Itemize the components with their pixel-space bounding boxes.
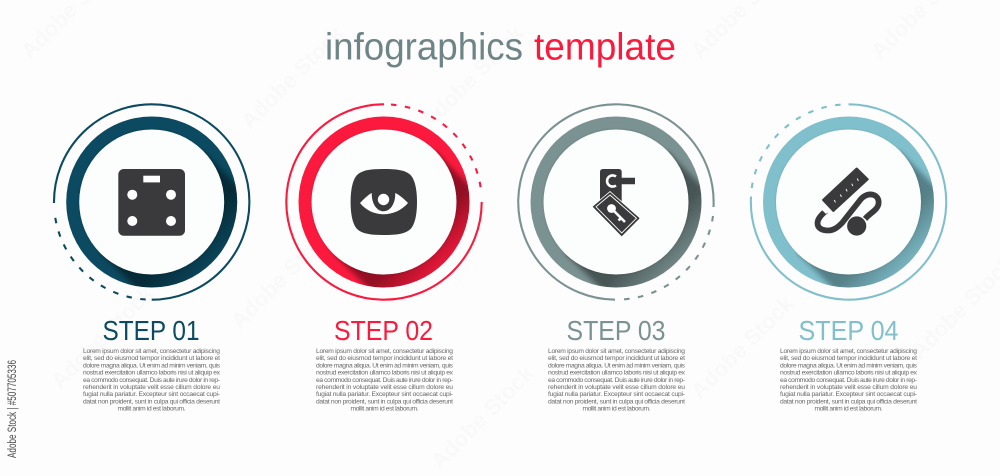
text block: step 03: ea commodo consequat. Duis aute irure dolor in rep-	[548, 377, 685, 384]
text block: step 02: nostrud exercitation ullamco laboris nisi ut aliquip ex	[316, 370, 454, 377]
text block: step 02: datat non proident, sunt in culpa qui officia deserunt	[316, 398, 453, 405]
text block: step 01: fugiat nulla pariatur. Excepteur sint occaecat cupi-	[83, 391, 220, 398]
text block: step 02: dolore magna aliqua. Ut enim ad minim veniam, quis	[316, 362, 454, 369]
watermark background: Adobe Stock	[46, 280, 159, 394]
text block: step 03: rehenderit in voluptate velit esse cillum dolore eu	[548, 384, 685, 391]
text block: step 02: rehenderit in voluptate velit esse cillum dolore eu	[316, 384, 453, 391]
text block: step 01: elit, sed do eiusmod tempor incididunt ut labore et	[83, 355, 220, 362]
text block: step 01: nostrud exercitation ullamco laboris nisi ut aliquip ex	[83, 370, 221, 377]
text block: step 02: ea commodo consequat. Duis aute irure dolor in rep-	[316, 377, 453, 384]
text block: step 03	[548, 348, 686, 413]
circle: step 01 rings	[52, 103, 250, 301]
text block: step 02	[316, 348, 454, 413]
text block: step 01: Lorem ipsum dolor sit amet, consectetur adipiscing	[83, 348, 220, 355]
text block: step 01	[83, 348, 221, 413]
text block: step 01: rehenderit in voluptate velit esse cillum dolore eu	[83, 384, 220, 391]
title	[325, 26, 676, 68]
text block: step 04: nostrud exercitation ullamco laboris nisi ut aliquip ex	[780, 370, 918, 377]
watermark background: Adobe Stock	[426, 360, 539, 474]
watermark background: Adobe Stock	[416, 20, 529, 134]
text block: step 04: fugiat nulla pariatur. Excepteur sint occaecat cupi-	[780, 391, 917, 398]
text block: step 04: rehenderit in voluptate velit esse cillum dolore eu	[780, 384, 917, 391]
text block: step 04: datat non proident, sunt in culpa qui officia deserunt	[780, 398, 917, 405]
text block: step 03: dolore magna aliqua. Ut enim ad minim veniam, quis	[548, 362, 686, 369]
circle: step 04 rings	[750, 103, 948, 301]
text block: step 01: ea commodo consequat. Duis aute irure dolor in rep-	[83, 377, 220, 384]
text block: step 02: elit, sed do eiusmod tempor incididunt ut labore et	[316, 355, 453, 362]
text block: step 04: ea commodo consequat. Duis aute irure dolor in rep-	[780, 377, 917, 384]
watermark background: Adobe Stock	[236, 20, 349, 134]
panel: step 02	[285, 103, 483, 410]
text block: step 04: elit, sed do eiusmod tempor incididunt ut labore et	[780, 355, 917, 362]
text block: step 01: mollit anim id est laborum.	[118, 406, 186, 413]
text block: step 03: elit, sed do eiusmod tempor incididunt ut labore et	[548, 355, 685, 362]
text block: step 04: Lorem ipsum dolor sit amet, consectetur adipiscing	[780, 348, 917, 355]
stock image id label: Adobe Stock | #507705336	[7, 360, 19, 458]
title: infographics	[325, 26, 523, 68]
icon: eye	[351, 169, 417, 235]
text block: step 02: Lorem ipsum dolor sit amet, consectetur adipiscing	[316, 348, 453, 355]
panel: step 03	[517, 103, 715, 410]
text block: step 03: nostrud exercitation ullamco laboris nisi ut aliquip ex	[548, 370, 686, 377]
text block: step 04: dolore magna aliqua. Ut enim ad minim veniam, quis	[780, 362, 918, 369]
heading: step 03: STEP 03	[566, 315, 666, 346]
text block: step 04	[780, 348, 918, 413]
title: template	[534, 26, 676, 68]
panel: step 04	[750, 103, 948, 410]
icon: power strip with cable	[818, 168, 879, 236]
circle: step 03 rings	[517, 103, 715, 301]
text block: step 01: dolore magna aliqua. Ut enim ad minim veniam, quis	[83, 362, 221, 369]
heading: step 01: STEP 01	[102, 315, 200, 346]
text block: step 02: fugiat nulla pariatur. Excepteur sint occaecat cupi-	[316, 391, 453, 398]
icon: door hanger with key tag	[592, 169, 641, 238]
icon: bathroom scale	[118, 169, 185, 236]
heading: step 02: STEP 02	[334, 315, 433, 346]
circle: step 02 rings	[285, 103, 483, 301]
text block: step 03: Lorem ipsum dolor sit amet, consectetur adipiscing	[548, 348, 685, 355]
text block: step 03: fugiat nulla pariatur. Excepteur sint occaecat cupi-	[548, 391, 685, 398]
text block: step 02: mollit anim id est laborum.	[350, 406, 419, 413]
text block: step 03: datat non proident, sunt in culpa qui officia deserunt	[548, 398, 685, 405]
watermark background: Adobe Stock	[686, 290, 799, 404]
text block: step 04: mollit anim id est laborum.	[814, 406, 883, 413]
watermark background: Adobe Stock	[226, 220, 339, 334]
text block: step 01: datat non proident, sunt in culpa qui officia deserunt	[83, 398, 220, 405]
text block: step 03: mollit anim id est laborum.	[582, 406, 651, 413]
heading: step 04: STEP 04	[798, 315, 898, 346]
panel: step 01	[52, 103, 250, 410]
